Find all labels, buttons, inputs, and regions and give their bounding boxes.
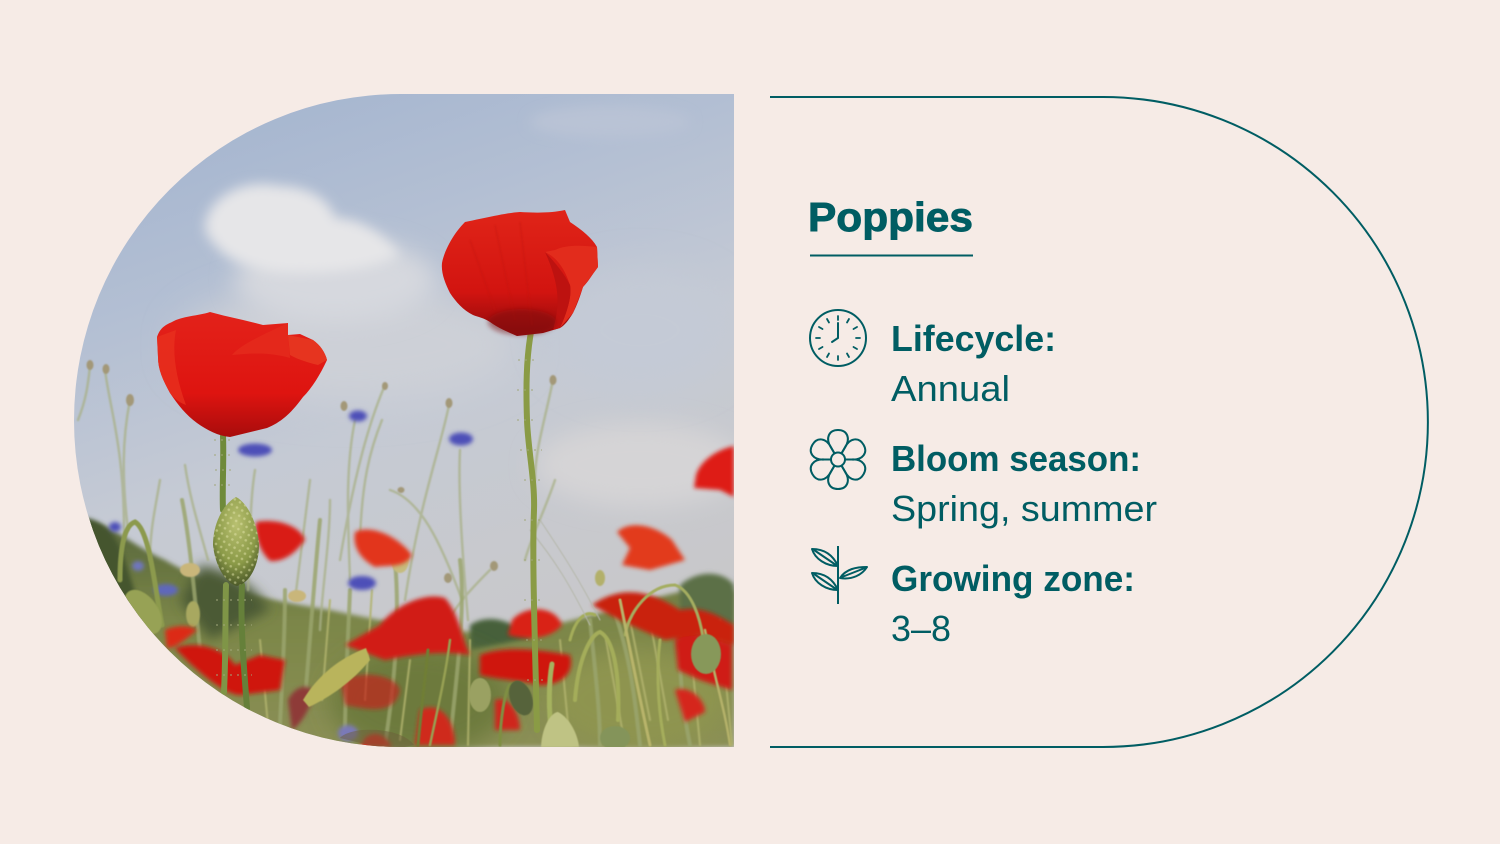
value: annual: Annual <box>891 368 1010 409</box>
clouds <box>180 106 745 507</box>
title underline <box>810 254 973 256</box>
distant foliage <box>70 518 734 747</box>
item: bloom season <box>808 430 1157 529</box>
distant seed heads <box>86 360 605 627</box>
icon: clock <box>810 310 866 366</box>
icon: flower <box>808 430 868 489</box>
label: lifecycle: Lifecycle: <box>891 318 1056 359</box>
center poppy <box>442 210 598 336</box>
label: growing zone: Growing zone: <box>891 558 1135 599</box>
poppy bud <box>213 497 259 586</box>
title: Poppies <box>808 194 973 240</box>
foreground grass <box>120 520 730 745</box>
background stems <box>78 366 732 745</box>
small seed pods <box>116 583 721 750</box>
cornflowers <box>109 410 473 741</box>
value: 3-8: 3–8 <box>891 608 951 649</box>
photo: poppy field <box>70 94 745 755</box>
flower stems <box>223 332 537 730</box>
sky <box>70 94 734 747</box>
value: spring, summer: Spring, summer <box>891 488 1157 529</box>
item: lifecycle <box>810 310 1056 409</box>
distant red poppies <box>165 446 734 747</box>
label: bloom season: Bloom season: <box>891 438 1141 479</box>
stem hairs <box>214 360 547 680</box>
item: growing zone <box>812 546 1135 649</box>
wheat ear <box>303 648 370 707</box>
panel outline <box>770 97 1428 747</box>
icon: plant <box>812 546 867 604</box>
left poppy <box>157 312 327 437</box>
